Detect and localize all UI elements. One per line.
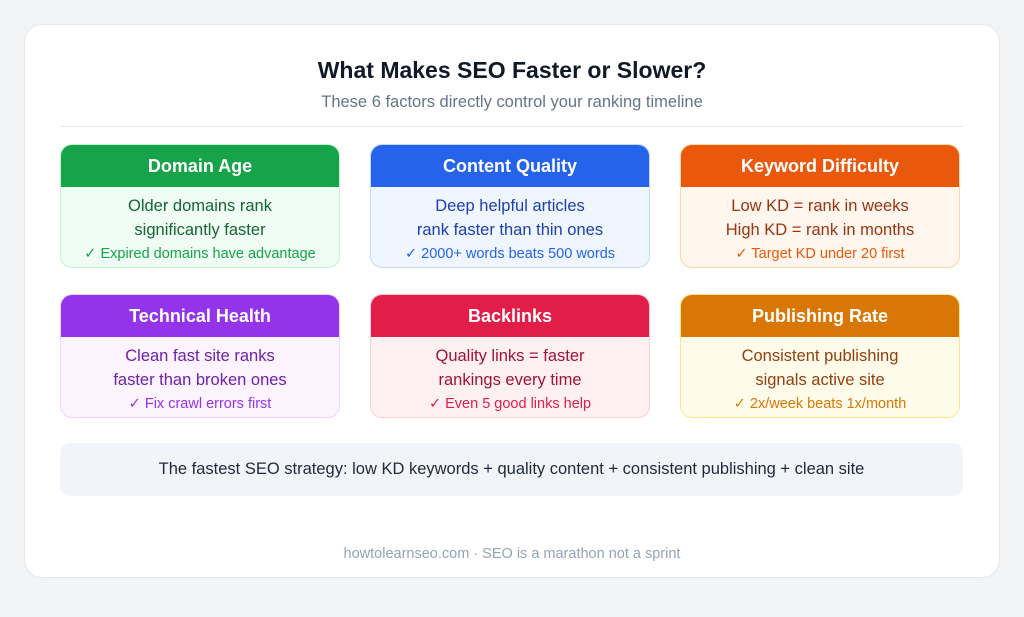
card: content quality: Content Quality [443,156,577,176]
card: publishing rate [680,294,960,418]
card: backlinks [370,294,650,418]
card: keyword difficulty: High KD = rank in months [726,221,914,239]
card: keyword difficulty: Low KD = rank in weeks [731,197,909,215]
card: domain age: Domain Age [148,156,252,176]
card: publishing rate: Consistent publishing [742,347,898,365]
card: technical health [60,294,340,418]
card: domain age: Older domains rank [128,197,272,215]
card: keyword difficulty: ✓ Target KD under 20 first [735,246,905,262]
card: domain age: ✓ Expired domains have advantage [84,246,316,262]
card: technical health: ✓ Fix crawl errors first [129,396,271,412]
strategy banner: The fastest SEO strategy: low KD keywords + quality content + consistent publishing + clean site [159,460,864,478]
card: domain age [60,144,340,268]
card: backlinks: Backlinks [468,306,552,326]
card: domain age: significantly faster [134,221,266,239]
card: technical health: Clean fast site ranks [125,347,275,365]
card: backlinks: rankings every time [438,371,582,389]
card: technical health: Technical Health [129,306,271,326]
strategy banner [60,443,963,496]
card: content quality: ✓ 2000+ words beats 500 words [405,246,615,262]
card: keyword difficulty [680,144,960,268]
card: content quality: Deep helpful articles [435,197,585,215]
card: keyword difficulty: Keyword Difficulty [741,156,899,176]
title: What Makes SEO Faster or Slower? [318,57,706,83]
card: backlinks: ✓ Even 5 good links help [429,396,591,412]
card: publishing rate: signals active site [755,371,885,389]
subtitle: These 6 factors directly control your ranking timeline [321,93,703,111]
footer: howtolearnseo.com · SEO is a marathon not a sprint [344,546,680,562]
card: publishing rate: Publishing Rate [752,306,888,326]
card: technical health: faster than broken ones [113,371,287,389]
card: publishing rate: ✓ 2x/week beats 1x/month [734,396,906,412]
card: content quality [370,144,650,268]
card: content quality: rank faster than thin ones [417,221,603,239]
card: backlinks: Quality links = faster [435,347,584,365]
